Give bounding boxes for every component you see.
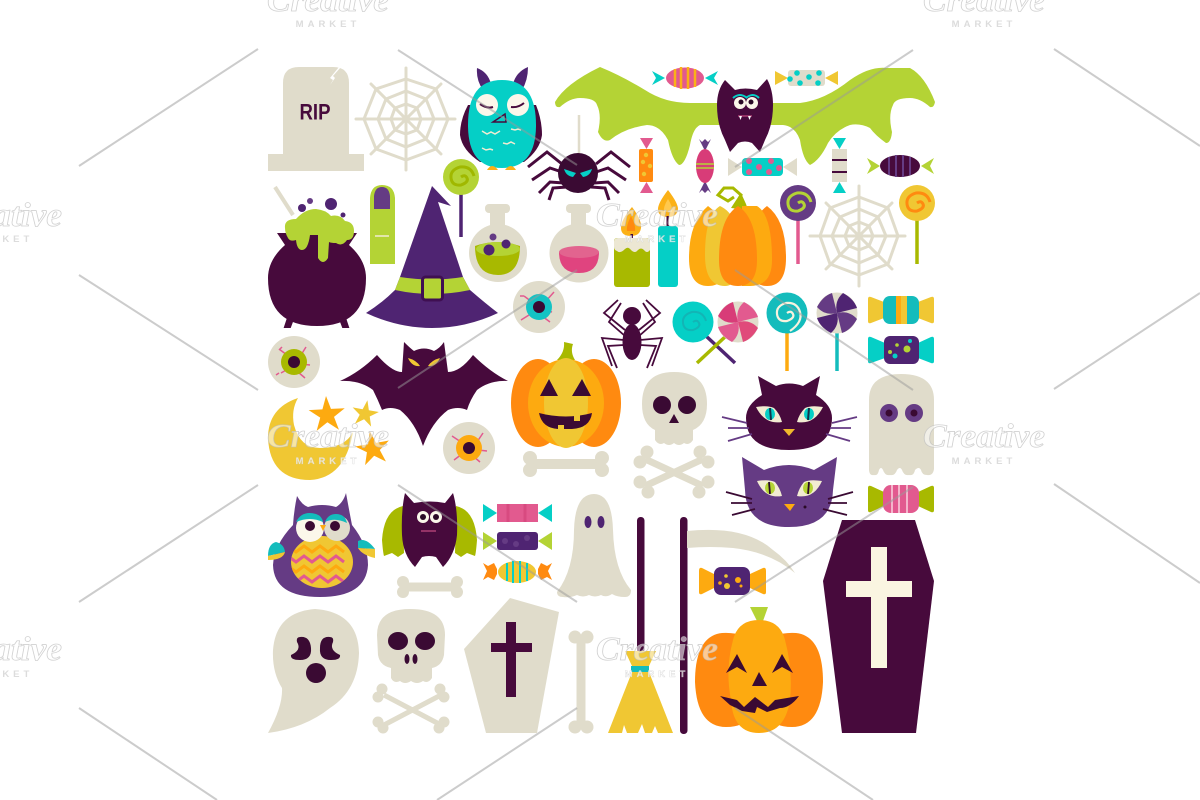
icon: broom (608, 517, 673, 733)
icon: purple owl (268, 493, 375, 597)
watermark top left: MARKET (296, 19, 360, 30)
icon: large jack-o-lantern (695, 607, 823, 733)
icon: lollipop stem overlap fix: green potion (469, 204, 527, 282)
icon: eyeball left (268, 336, 320, 388)
icon: small pumpkin (689, 188, 786, 286)
icon: lollipop yellow (899, 185, 935, 264)
icon: crescent moon and stars (268, 395, 392, 480)
watermark center: Creative (596, 197, 718, 234)
icon: spider web right (810, 186, 905, 286)
icon: skull middle (642, 372, 707, 445)
icon: eyeball 1 (513, 281, 565, 333)
icon: green wings bat (555, 67, 935, 165)
icon: tall ghost right (869, 374, 934, 475)
icon: lollipop purple spiral (780, 185, 816, 264)
icon: pink potion (550, 204, 608, 282)
icon: bottom skull (377, 609, 445, 683)
watermark moon: MARKET (296, 456, 360, 467)
icon: lollipop green (443, 159, 479, 237)
watermark top right: MARKET (952, 19, 1016, 30)
watermark bottom center: Creative (596, 631, 718, 668)
icon: candles (614, 190, 678, 287)
watermark center: MARKET (625, 234, 689, 245)
icon: beige coffin (464, 598, 559, 733)
watermark right: Creative (923, 418, 1045, 455)
icon: lollipop teal spiral (766, 292, 808, 371)
icon: tombstone RIP (268, 67, 364, 171)
icon: candy above coffin (868, 485, 934, 513)
watermark top left (267, 0, 389, 30)
icon: crossbones (634, 446, 714, 498)
icon: yellow and teal candies (868, 296, 934, 364)
icon: cauldron (268, 187, 366, 327)
icon: large coffin (823, 520, 934, 733)
icon: lollipop purple swirl (816, 292, 858, 371)
icon: candies top row (639, 67, 934, 193)
icon: purple cat (726, 457, 853, 527)
icon: large bat (340, 342, 508, 446)
watermark right: MARKET (952, 456, 1016, 467)
icon: three candies (483, 504, 552, 583)
icon: small ghost (557, 494, 631, 597)
watermarks (0, 0, 1045, 680)
icon: tombstone RIP: RIP (300, 100, 330, 124)
icon: small bat with green wings (382, 493, 477, 567)
icon: witch hat (366, 186, 498, 328)
watermark moon: Creative (267, 418, 389, 455)
icon: vertical bone (568, 630, 594, 734)
icon: jack-o-lantern middle (511, 342, 621, 448)
icon: witch finger (370, 185, 395, 264)
icon: candy by scythe (699, 567, 766, 595)
icon: eyeball bottom (443, 422, 495, 474)
icon: ghost speech bubble (268, 609, 359, 733)
icon: spider middle (602, 300, 662, 368)
icon: spider web top (356, 68, 455, 170)
icon: bone under pumpkin (523, 451, 609, 477)
icon: black cat (722, 376, 857, 450)
watermark bottom left (0, 631, 62, 680)
icon: lollipops teal and pink (672, 302, 758, 363)
icon: bone small (397, 576, 463, 598)
watermark bottom center: MARKET (625, 669, 689, 680)
icon: bottom crossbones (372, 684, 450, 734)
icon: scythe (680, 517, 795, 734)
icon: teal owl (460, 67, 542, 170)
icon: black spider top (528, 115, 630, 200)
watermark top right (923, 0, 1045, 30)
